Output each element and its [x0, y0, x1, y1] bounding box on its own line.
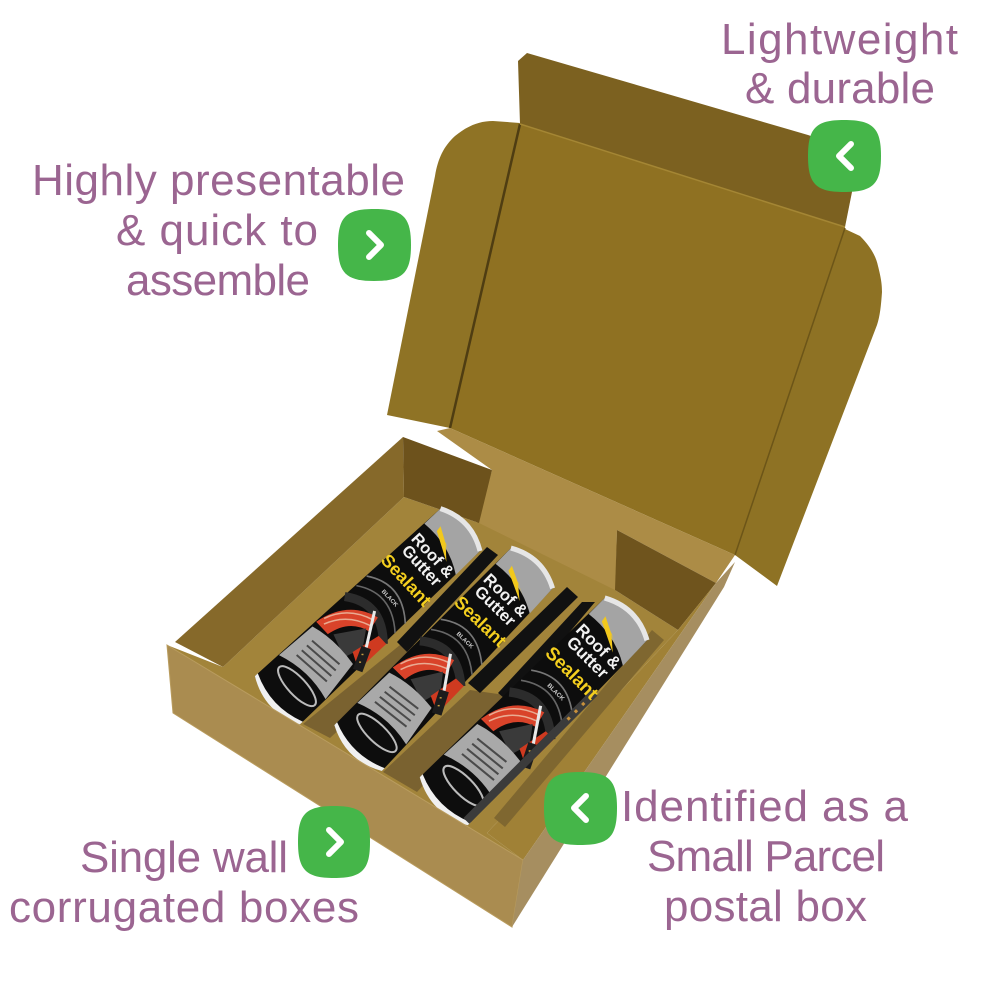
cartridge 2: Gutter	[471, 583, 519, 630]
callout: lightweight and durable	[721, 15, 958, 113]
lid top flap	[518, 53, 852, 227]
cartridge 2: BLACK	[455, 631, 475, 651]
front outer wall	[167, 645, 523, 927]
callout: small parcel: Small Parcel	[647, 832, 885, 881]
callout: single wall corrugated: corrugated boxes	[9, 883, 359, 932]
open box base	[167, 428, 735, 860]
callout: single wall corrugated	[9, 833, 359, 932]
callout: lightweight and durable: & durable	[745, 64, 935, 113]
callout: small parcel: postal box	[664, 882, 867, 931]
cartridge 3: Roof &	[572, 620, 625, 673]
callout: highly presentable: Highly presentable	[32, 156, 405, 205]
left inner wall	[175, 437, 404, 667]
shadow right of cartridge 3	[494, 630, 664, 827]
callout: highly presentable: & quick to	[116, 206, 318, 255]
cartridge 1: Roof &	[407, 530, 458, 582]
callout: small parcel	[621, 782, 909, 931]
cartridge 3	[413, 589, 656, 832]
callout: highly presentable	[32, 156, 405, 305]
callout: lightweight and durable: Lightweight	[721, 15, 958, 64]
callout: highly presentable: assemble	[126, 256, 310, 305]
shadow between cartridges 2 and 3	[383, 690, 505, 792]
callout: small parcel: Identified as a	[621, 782, 909, 831]
lid right flap	[735, 229, 882, 586]
inner right wall	[487, 583, 716, 860]
cartridge 1: BLACK	[380, 589, 399, 609]
back panel	[437, 428, 735, 610]
cartridge 2	[328, 540, 561, 777]
back right small wall	[615, 530, 716, 630]
callout: single wall corrugated: Single wall	[80, 833, 288, 882]
icon: left chevron badge bottom	[544, 772, 617, 845]
icon: left chevron badge top	[808, 120, 881, 192]
icon: right chevron badge bottom	[298, 806, 370, 878]
cartridge 2: Roof &	[480, 570, 531, 621]
cartridge 1: Sealant	[377, 550, 435, 611]
cartridge 3: Sealant	[541, 642, 603, 704]
dark strips between cartridges	[397, 547, 595, 703]
floor	[167, 497, 678, 860]
shadow between cartridges 1 and 2	[303, 645, 430, 738]
icon: right chevron badge left	[338, 209, 411, 281]
box front walls	[167, 562, 735, 927]
cartridge 2: Sealant	[450, 592, 510, 651]
back left small wall	[403, 437, 492, 523]
cartridge 1	[248, 500, 489, 731]
box lid	[387, 53, 882, 586]
cartridge 3: BLACK	[545, 682, 566, 703]
cartridge 3: Gutter	[563, 633, 613, 683]
cartridge 1: Gutter	[398, 542, 445, 591]
lid left flap	[387, 121, 520, 428]
right outer wall	[512, 562, 735, 927]
lid main panel	[450, 124, 845, 555]
